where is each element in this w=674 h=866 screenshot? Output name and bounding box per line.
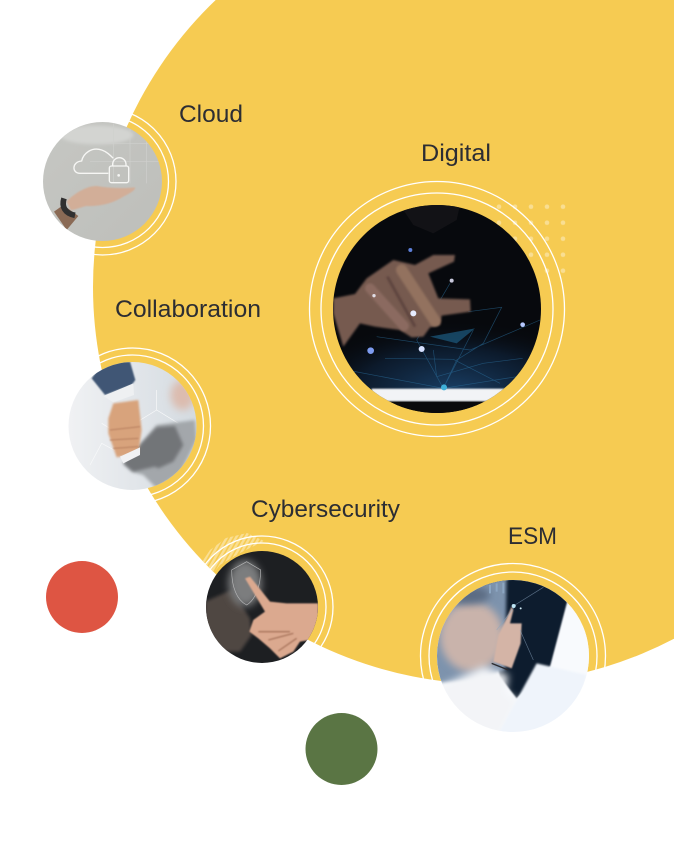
digital photo (330, 200, 545, 416)
panel: cybersecurity (205, 500, 400, 663)
panel: esm (420, 523, 606, 748)
cybersecurity rings (191, 536, 333, 678)
esm rings (420, 564, 606, 748)
cloud label: Cloud (179, 101, 243, 128)
panel: cloud (29, 101, 243, 255)
panel: collaboration (68, 300, 260, 502)
panel: digital (310, 140, 564, 436)
stripe pattern (202, 533, 264, 572)
collaboration photo (68, 362, 196, 490)
esm photo (437, 580, 589, 732)
yellow background circle (93, 0, 674, 684)
dot pattern (491, 199, 571, 279)
digital rings (310, 182, 564, 436)
cloud rings (29, 108, 176, 255)
cybersecurity label: Cybersecurity (251, 496, 400, 523)
esm label: ESM (508, 523, 557, 550)
decorative circle: red (46, 561, 118, 633)
cloud photo (40, 120, 165, 245)
collaboration rings (54, 348, 210, 504)
digital label: Digital (421, 140, 491, 167)
cybersecurity photo (203, 548, 321, 666)
decorative circle: green (306, 713, 378, 785)
collaboration label: Collaboration (115, 296, 261, 323)
